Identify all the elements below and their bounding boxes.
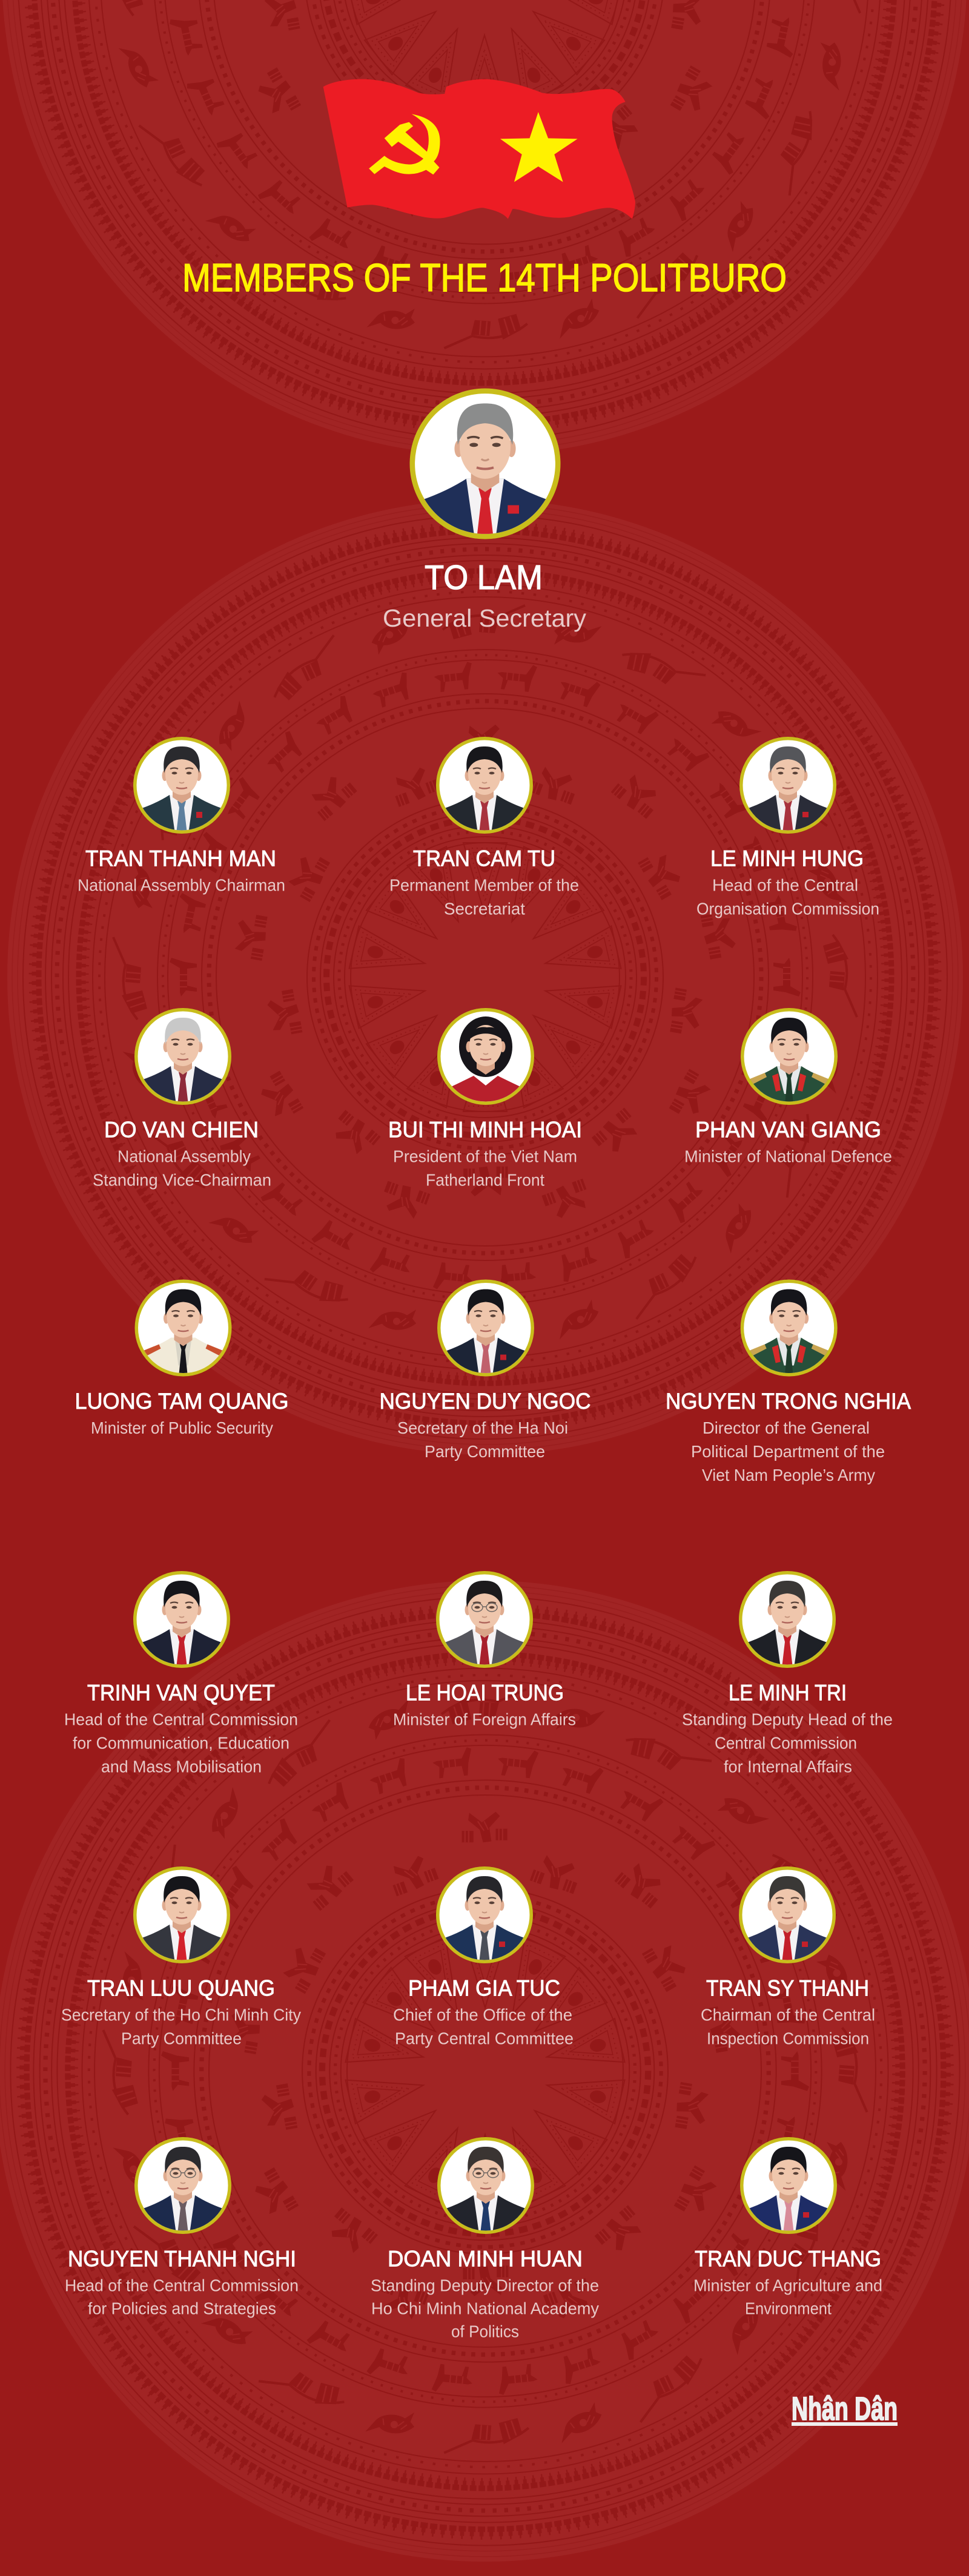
role line 2: Party Committee [121, 2029, 242, 2047]
name: NGUYEN THANH NGHI [68, 2246, 296, 2271]
role line 2: Central Commission [715, 1734, 857, 1752]
portrait: Tran Luu Quang [133, 1866, 230, 1969]
name: TRAN CAM TU [413, 846, 555, 871]
member: Do Van Chien [93, 1008, 271, 1189]
role: National Assembly [117, 1147, 251, 1166]
role line 2: Environment [745, 2299, 832, 2317]
name: TRINH VAN QUYET [87, 1681, 275, 1705]
role: Head of the Central [712, 875, 858, 895]
role: General Secretary: General Secretary [383, 604, 586, 632]
role: Secretary of the Ha Noi [397, 1418, 568, 1437]
member: Tran Luu Quang [61, 1866, 301, 2047]
title: MEMBERS OF THE 14TH POLITBURO [182, 255, 787, 300]
portrait: Le Hoai Trung [436, 1571, 533, 1674]
portrait: Luong Tam Quang [134, 1280, 231, 1383]
role line 2: Ho Chi Minh National Academy [371, 2299, 599, 2317]
role: Permanent Member of the [389, 875, 579, 895]
member: Doan Minh Huan [371, 2137, 599, 2340]
background: lower bronze drum pattern [0, 1581, 969, 2561]
name: TRAN THANH MAN [85, 846, 276, 871]
portrait: Do Van Chien [134, 1008, 231, 1111]
logo: Nhan Dan newspaper: Nhân Dân [792, 2391, 898, 2427]
member: Bui Thi Minh Hoai [388, 1008, 582, 1189]
name: PHAM GIA TUC [408, 1976, 560, 2000]
member: Luong Tam Quang [75, 1280, 288, 1437]
role line 2: Party Central Committee [395, 2029, 574, 2047]
member: Tran Thanh Man [78, 737, 285, 895]
member: Nguyen Trong Nghia [666, 1280, 911, 1484]
panel: General Secretary To Lam [383, 389, 586, 632]
role line 2: Party Committee [425, 1442, 545, 1461]
portrait: Nguyen Thanh Nghi [134, 2137, 231, 2240]
name: DO VAN CHIEN [104, 1118, 259, 1142]
member: Nguyen Duy Ngoc [379, 1280, 591, 1461]
member: Le Minh Tri [682, 1571, 893, 1776]
role line 2: Secretariat [444, 900, 525, 918]
role: Minister of Public Security [91, 1418, 273, 1437]
portrait: Phan Van Giang [741, 1008, 838, 1111]
role: Minister of Agriculture and [693, 2276, 882, 2294]
portrait: Tran Thanh Man [133, 737, 230, 840]
portrait: Tran Cam Tu [436, 737, 533, 840]
name: LUONG TAM QUANG [75, 1389, 288, 1414]
background: top bronze drum pattern [2, 0, 967, 455]
member: Tran Duc Thang [693, 2137, 882, 2317]
role line 2: for Policies and Strategies [88, 2299, 276, 2317]
role: Secretary of the Ho Chi Minh City [61, 2005, 301, 2024]
logo: Nhan Dan newspaper [792, 2391, 898, 2427]
member: Le Hoai Trung [393, 1571, 576, 1729]
portrait: Le Minh Hung [739, 737, 836, 840]
role: Minister of Foreign Affairs [393, 1710, 576, 1729]
name: TRAN DUC THANG [695, 2246, 881, 2271]
role line 3: for Internal Affairs [724, 1757, 852, 1776]
portrait: Le Minh Tri [739, 1571, 836, 1674]
role: Chairman of the Central [701, 2005, 875, 2024]
role line 3: Viet Nam People’s Army [702, 1466, 875, 1484]
portrait: To Lam [410, 389, 560, 548]
portrait: Doan Minh Huan [437, 2137, 534, 2240]
portrait: Nguyen Trong Nghia [741, 1280, 838, 1383]
role: National Assembly Chairman [78, 875, 285, 895]
name: LE HOAI TRUNG [406, 1681, 564, 1705]
portrait: Bui Thi Minh Hoai [437, 1008, 534, 1111]
name: NGUYEN DUY NGOC [379, 1389, 591, 1414]
role line 3: and Mass Mobilisation [101, 1757, 262, 1776]
role line 2: Organisation Commission [696, 900, 879, 918]
member: Le Minh Hung [696, 737, 879, 918]
name: TRAN LUU QUANG [87, 1976, 275, 2000]
portrait: Nguyen Duy Ngoc [437, 1280, 534, 1383]
member: Phan Van Giang [684, 1008, 892, 1166]
role line 2: for Communication, Education [73, 1734, 289, 1752]
portrait: Tran Duc Thang [740, 2137, 837, 2240]
portrait: Pham Gia Tuc [436, 1866, 533, 1969]
role: Chief of the Office of the [393, 2005, 572, 2024]
role: Standing Deputy Head of the [682, 1710, 893, 1729]
name: To Lam: TO LAM [425, 558, 543, 597]
member: Tran Cam Tu [389, 737, 579, 918]
member: Pham Gia Tuc [393, 1866, 574, 2047]
role: Head of the Central Commission [65, 2276, 299, 2294]
role: Director of the General [703, 1418, 870, 1437]
background: middle bronze drum pattern [7, 499, 963, 1455]
role: Standing Deputy Director of the [371, 2276, 599, 2294]
portrait: Tran Sy Thanh [739, 1866, 836, 1969]
role: Minister of National Defence [684, 1147, 892, 1166]
role line 3: of Politics [451, 2322, 519, 2340]
member: Tran Sy Thanh [701, 1866, 875, 2047]
name: NGUYEN TRONG NGHIA [666, 1389, 911, 1414]
role: President of the Viet Nam [393, 1147, 577, 1166]
role line 2: Inspection Commission [707, 2029, 869, 2047]
role: Head of the Central Commission [64, 1710, 298, 1729]
role line 2: Standing Vice-Chairman [93, 1171, 271, 1189]
name: BUI THI MINH HOAI [388, 1118, 582, 1142]
name: LE MINH TRI [729, 1681, 847, 1705]
role line 2: Political Department of the [691, 1442, 885, 1461]
member: Nguyen Thanh Nghi [65, 2137, 299, 2317]
name: LE MINH HUNG [710, 846, 864, 871]
icon: Party flag with hammer, sickle and star [323, 79, 635, 219]
member: Trinh Van Quyet [64, 1571, 298, 1776]
name: TRAN SY THANH [706, 1976, 869, 2000]
name: PHAN VAN GIANG [695, 1118, 881, 1142]
portrait: Trinh Van Quyet [133, 1571, 230, 1674]
role line 2: Fatherland Front [426, 1171, 544, 1189]
name: DOAN MINH HUAN [388, 2246, 583, 2271]
